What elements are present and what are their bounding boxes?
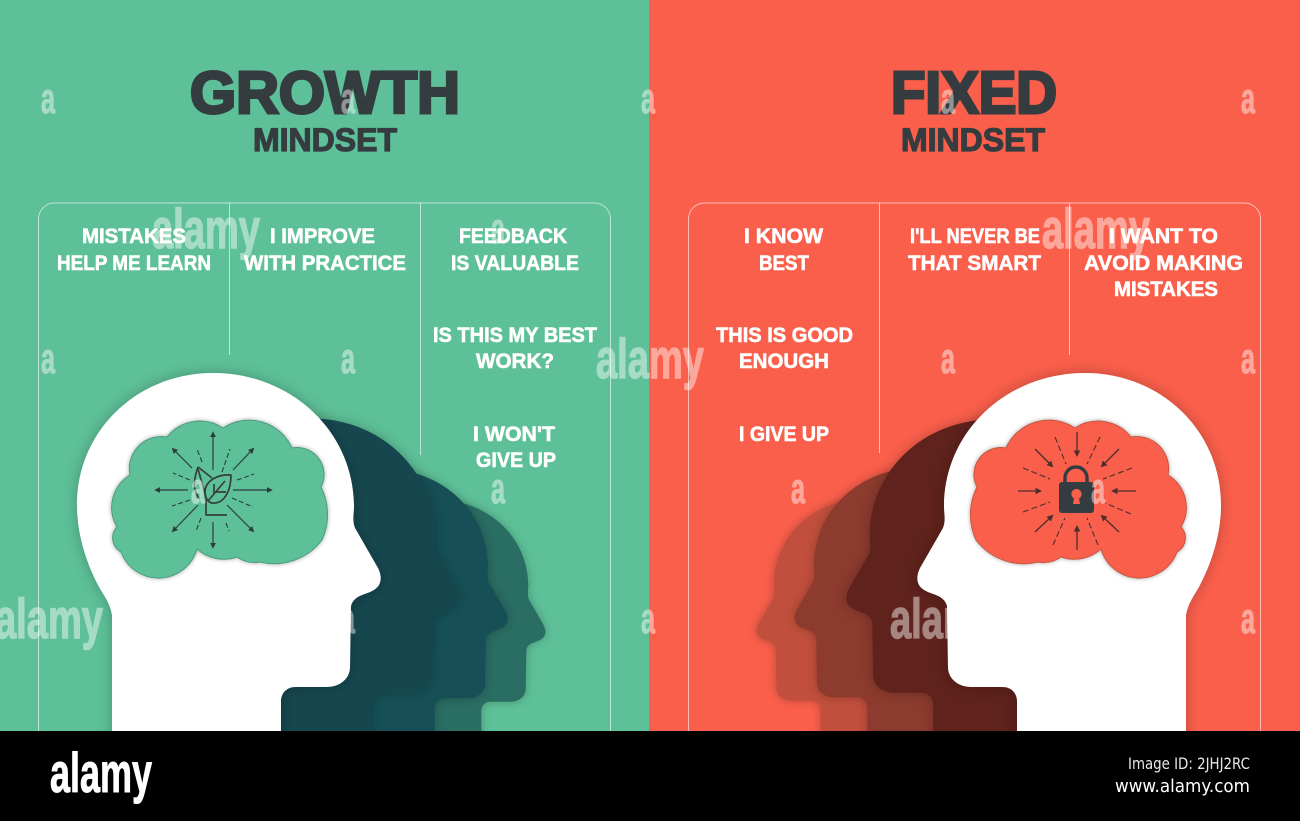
growth statement: feedback: FEEDBACK: [459, 225, 567, 248]
growth statement: won't give up: [473, 423, 556, 472]
growth statement: mistakes: [57, 225, 211, 275]
growth statement: mistakes: HELP ME LEARN: [57, 252, 211, 275]
watermark overlay: a: [941, 75, 956, 123]
head silhouette: third fixed echo: [757, 499, 952, 748]
website: www.alamy.com: [1115, 776, 1250, 797]
fixed statement: avoid mistakes: MISTAKES: [1114, 278, 1218, 301]
brain: growth: [112, 420, 328, 578]
watermark overlay: a: [791, 465, 806, 513]
watermark overlay: alamy: [890, 587, 998, 650]
footer bar: [0, 731, 1300, 821]
fixed statement: avoid mistakes: [1084, 225, 1243, 301]
watermark overlay: a: [491, 465, 506, 513]
growth statement: won't give up: GIVE UP: [476, 449, 556, 472]
growth statement: best work: IS THIS MY BEST: [433, 324, 597, 347]
head silhouette: third growth echo: [350, 500, 545, 749]
watermark overlay: a: [41, 335, 56, 383]
subtitle: fixed mindset: MINDSET: [901, 122, 1045, 158]
panel: growth background: [0, 0, 649, 731]
watermark overlay: a: [41, 75, 56, 123]
head silhouette: fixed white head: [917, 373, 1221, 760]
watermark overlay: alamy: [1042, 197, 1150, 260]
image id: Image ID: 2JHJ2RC: [1128, 754, 1250, 773]
watermark overlay: a: [341, 75, 356, 123]
watermark overlay: alamy: [152, 197, 260, 260]
subtitle: growth mindset: MINDSET: [253, 122, 397, 158]
head silhouette: second growth echo: [286, 469, 507, 752]
growth statement: mistakes: MISTAKES: [82, 225, 186, 248]
watermark overlay: a: [1241, 75, 1256, 123]
watermark overlay: a: [341, 335, 356, 383]
growth statement: best work: WORK?: [476, 350, 554, 373]
growth statement: feedback: IS VALUABLE: [451, 252, 579, 275]
icon: leaves with radiating arrows: [156, 433, 271, 547]
watermark overlay: a: [941, 335, 956, 383]
fixed statement: good enough: [716, 324, 853, 373]
fixed statement: know best: BEST: [759, 252, 809, 275]
icon: padlock with inward arrows: [1018, 432, 1136, 550]
footer logo: alamy: [50, 741, 152, 804]
watermark overlay: a: [341, 595, 356, 643]
watermark overlay: a: [1241, 595, 1256, 643]
watermark overlay: a: [1241, 335, 1256, 383]
panel: fixed background: [649, 0, 1300, 731]
head silhouette: growth white head: [77, 373, 381, 760]
growth statement: practice: I IMPROVE: [270, 225, 375, 248]
fixed statement: avoid mistakes: I WANT TO: [1109, 225, 1218, 248]
fixed statement: give up: I GIVE UP: [739, 423, 829, 446]
growth statement: best work: [433, 324, 597, 373]
fixed statement: know best: [744, 225, 823, 275]
head silhouette: second fixed echo: [795, 468, 1016, 751]
title: fixed: FIXED: [891, 60, 1057, 126]
fixed table frame: [688, 203, 1260, 731]
watermark overlay: a: [491, 205, 506, 253]
watermark overlay: a: [641, 595, 656, 643]
fixed statement: good enough: THIS IS GOOD: [716, 324, 853, 347]
watermark overlay: a: [191, 465, 206, 513]
title: growth: GROWTH: [190, 60, 460, 126]
watermark overlay: [0, 75, 1256, 650]
brain: fixed: [970, 420, 1186, 578]
fixed statement: never smart: [908, 225, 1041, 275]
head silhouette: first growth echo: [193, 419, 458, 755]
fixed statement: know best: I KNOW: [744, 225, 823, 248]
fixed statement: never smart: THAT SMART: [908, 252, 1041, 275]
fixed statement: good enough: ENOUGH: [739, 350, 829, 373]
watermark overlay: a: [641, 75, 656, 123]
fixed statement: avoid mistakes: AVOID MAKING: [1084, 252, 1243, 275]
growth statement: practice: [244, 225, 406, 275]
growth statement: practice: WITH PRACTICE: [244, 252, 406, 275]
growth statement: won't give up: I WON'T: [473, 423, 555, 446]
growth statement: feedback: [451, 225, 579, 275]
head silhouette: first fixed echo: [846, 420, 1111, 756]
watermark overlay: alamy: [596, 327, 704, 390]
fixed statement: never smart: I'LL NEVER BE: [910, 225, 1040, 248]
watermark overlay: a: [1091, 465, 1106, 513]
growth table frame: [38, 203, 610, 731]
